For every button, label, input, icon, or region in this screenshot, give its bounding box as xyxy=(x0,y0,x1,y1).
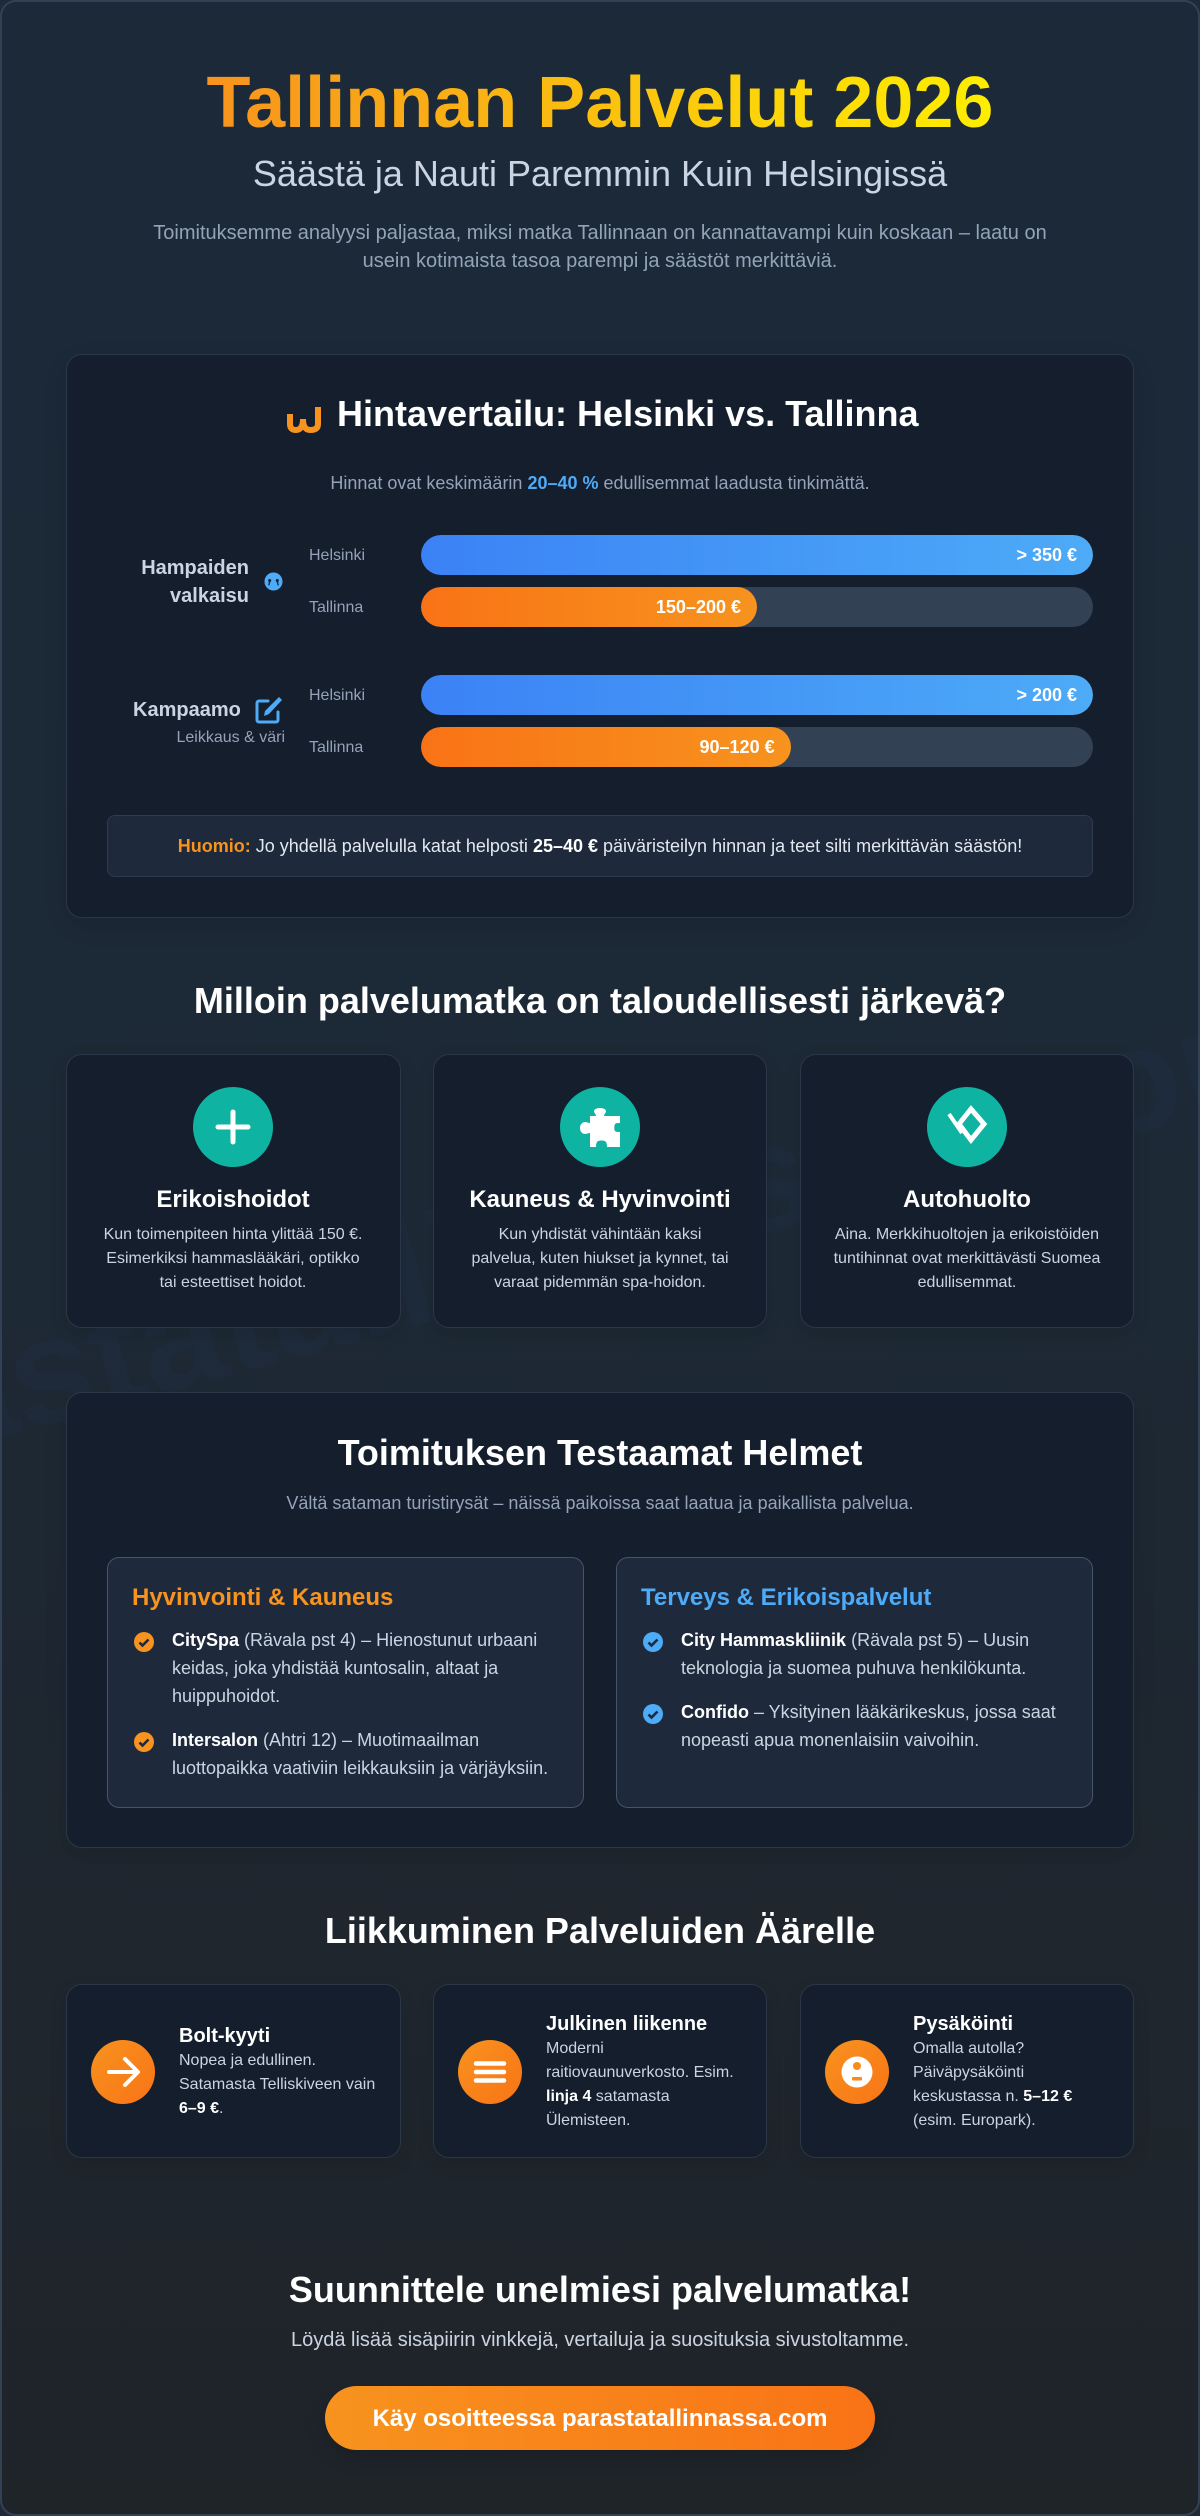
card text xyxy=(913,2040,1072,2129)
subtitle: Säästä ja Nauti Paremmin Kuin Helsingissä xyxy=(253,153,947,194)
card text: varaat pidemmän spa-hoidon. xyxy=(494,1274,706,1291)
list item: Confido: nopeasti apua monenlaisiin vaivoihin. xyxy=(681,1730,979,1750)
panel intro: Hinnat ovat keskimäärin 20–40 % edullisemmat laadusta tinkimättä. xyxy=(330,473,870,493)
bar: Tallinn hair salon: 90–120 € xyxy=(700,737,775,757)
card text: Kun toimenpiteen hinta ylittää 150 €. xyxy=(104,1226,362,1243)
panel heading: Hintavertailu: Helsinki vs. Tallinna xyxy=(337,393,919,434)
card text: Aina. Merkkihuoltojen ja erikoistöiden xyxy=(835,1226,1099,1243)
list item: CitySpa: keidas, joka yhdistää kuntosalin, altaat ja xyxy=(172,1658,498,1678)
panel heading: Toimituksen Testaamat Helmet xyxy=(338,1432,862,1473)
CTA heading: Suunnittele unelmiesi palvelumatka! xyxy=(289,2269,911,2310)
bar label: Tallinna xyxy=(309,739,363,756)
card: parking xyxy=(800,1984,1134,2158)
callout: note xyxy=(107,815,1093,877)
icon: parking badge xyxy=(825,2040,889,2104)
card text: palvelua, kuten hiukset ja kynnet, tai xyxy=(471,1250,729,1267)
bar: Helsinki hair salon: > 200 € xyxy=(1016,685,1077,705)
intro text xyxy=(153,222,1047,272)
card text: edullisemmat. xyxy=(918,1274,1016,1291)
card text: raitiovaunuverkosto. Esim. xyxy=(546,2064,734,2081)
card text: (esim. Europark). xyxy=(913,2112,1036,2129)
bar label: Helsinki xyxy=(309,687,365,704)
panel: price comparison xyxy=(66,354,1134,918)
icon: diamond mark xyxy=(927,1087,1007,1167)
heading: when worthwhile: Milloin palvelumatka on taloudellisesti järkevä? xyxy=(194,980,1006,1021)
list item: City Hammaskliinik: City Hammaskliinik (Rävala pst 5) – Uusin xyxy=(681,1630,1029,1650)
bar: Tallinn teeth whitening xyxy=(421,587,1093,627)
icon: check xyxy=(643,1704,663,1724)
intro text: usein kotimaista tasoa parempi ja säästöt merkittäviä. xyxy=(363,250,837,272)
card text: tuntihinnat ovat merkittävästi Suomea xyxy=(834,1250,1100,1267)
callout: note: Huomio: Jo yhdellä palvelulla katat helposti 25–40 € päiväristeilyn hinnan ja teet silti merkittävän säästön! xyxy=(178,836,1022,856)
subpanel heading: Terveys & Erikoispalvelut xyxy=(641,1584,931,1611)
list item: CitySpa: huippuhoidot. xyxy=(172,1686,280,1706)
row label: Kampaamo: Kampaamo xyxy=(133,699,241,721)
CTA button xyxy=(325,2386,875,2450)
card text: keskustassa n. 5–12 € xyxy=(913,2088,1072,2105)
icon: arrow xyxy=(91,2040,155,2104)
list item: CitySpa xyxy=(172,1630,537,1706)
intro text: Toimituksemme analyysi paljastaa, miksi matka Tallinnaan on kannattavampi kuin koskaan – laatu on xyxy=(153,222,1047,244)
icon: check xyxy=(134,1632,154,1652)
card text: Kun yhdistät vähintään kaksi xyxy=(499,1226,701,1243)
list item: City Hammaskliinik: teknologia ja suomea puhuva henkilökunta. xyxy=(681,1658,1026,1678)
subpanel: wellness and beauty xyxy=(107,1557,584,1808)
list item: Intersalon xyxy=(172,1730,548,1778)
list item: Confido: Confido – Yksityinen lääkärikeskus, jossa saat xyxy=(681,1702,1056,1722)
card title: Julkinen liikenne xyxy=(546,2013,707,2035)
bar: Helsinki teeth whitening: > 350 € xyxy=(1016,545,1077,565)
card title: Pysäköinti xyxy=(913,2013,1013,2035)
list item: City Hammaskliinik xyxy=(681,1630,1029,1678)
card: Kauneus & Hyvinvointi xyxy=(433,1054,767,1328)
card: Bolt xyxy=(66,1984,400,2158)
card title: Kauneus & Hyvinvointi xyxy=(469,1186,731,1213)
bar label: Tallinna xyxy=(309,599,363,616)
bar: Tallinn hair salon xyxy=(421,727,1093,767)
card: Autohuolto xyxy=(800,1054,1134,1328)
bar: Tallinn teeth whitening: 150–200 € xyxy=(656,597,741,617)
heading: getting around: Liikkuminen Palveluiden Äärelle xyxy=(325,1910,875,1951)
card text xyxy=(104,1226,362,1291)
panel: tested gems xyxy=(66,1392,1134,1848)
bar label: Helsinki xyxy=(309,547,365,564)
card title: Erikoishoidot xyxy=(156,1186,310,1213)
list item: CitySpa: CitySpa (Rävala pst 4) – Hienostunut urbaani xyxy=(172,1630,537,1650)
card text: Nopea ja edullinen. xyxy=(179,2052,316,2069)
card title: Bolt-kyyti xyxy=(179,2025,270,2047)
list item: Intersalon: luottopaikka vaativiin leikkauksiin ja värjäyksiin. xyxy=(172,1758,548,1778)
CTA button: Käy osoitteessa parastatallinnassa.com xyxy=(373,2405,827,2432)
list item: Intersalon: Intersalon (Ahtri 12) – Muotimaailman xyxy=(172,1730,479,1750)
card text: Omalla autolla? xyxy=(913,2040,1024,2057)
card text: 6–9 €. xyxy=(179,2100,224,2117)
card text: Ülemisteen. xyxy=(546,2112,630,2129)
card text: Päiväpysäköinti xyxy=(913,2064,1024,2081)
card text: Esimerkiksi hammaslääkäri, optikko xyxy=(106,1250,360,1267)
card text: Moderni xyxy=(546,2040,604,2057)
subpanel: health and specialist services xyxy=(616,1557,1093,1808)
CTA text: Löydä lisää sisäpiirin vinkkejä, vertailuja ja suosituksia sivustoltamme. xyxy=(291,2329,909,2351)
row label: Hampaiden valkaisu: Hampaiden xyxy=(141,557,249,579)
icon: puzzle xyxy=(560,1087,640,1167)
row label: Hampaiden valkaisu: valkaisu xyxy=(170,585,249,607)
card text xyxy=(834,1226,1100,1291)
card text xyxy=(471,1226,729,1291)
card text xyxy=(546,2040,734,2129)
icon: menu lines xyxy=(458,2040,522,2104)
card title: Autohuolto xyxy=(903,1186,1031,1213)
card text: linja 4 satamasta xyxy=(546,2088,670,2105)
icon: edit xyxy=(256,697,282,724)
list item: Confido xyxy=(681,1702,1056,1750)
icon: check xyxy=(134,1732,154,1752)
title: Tallinnan Palvelut 2026 xyxy=(206,63,993,143)
subpanel heading: Hyvinvointi & Kauneus xyxy=(132,1584,393,1611)
card text: Satamasta Telliskiveen vain xyxy=(179,2076,375,2093)
card text xyxy=(179,2052,375,2117)
row sublabel: Leikkaus & väri xyxy=(176,729,285,746)
icon: check xyxy=(643,1632,663,1652)
panel intro: Vältä sataman turistirysät – näissä paikoissa saat laatua ja paikallista palvelua. xyxy=(286,1493,914,1513)
card text: tai esteettiset hoidot. xyxy=(160,1274,306,1291)
icon: tooth-like glyph xyxy=(287,407,321,433)
bar: Helsinki hair salon xyxy=(421,675,1093,715)
card: Erikoishoidot xyxy=(66,1054,400,1328)
icon: tooth face xyxy=(264,572,282,590)
icon: plus xyxy=(193,1087,273,1167)
bar: Helsinki teeth whitening xyxy=(421,535,1093,575)
card: public transport xyxy=(433,1984,767,2158)
row label: Hampaiden valkaisu xyxy=(141,557,249,607)
